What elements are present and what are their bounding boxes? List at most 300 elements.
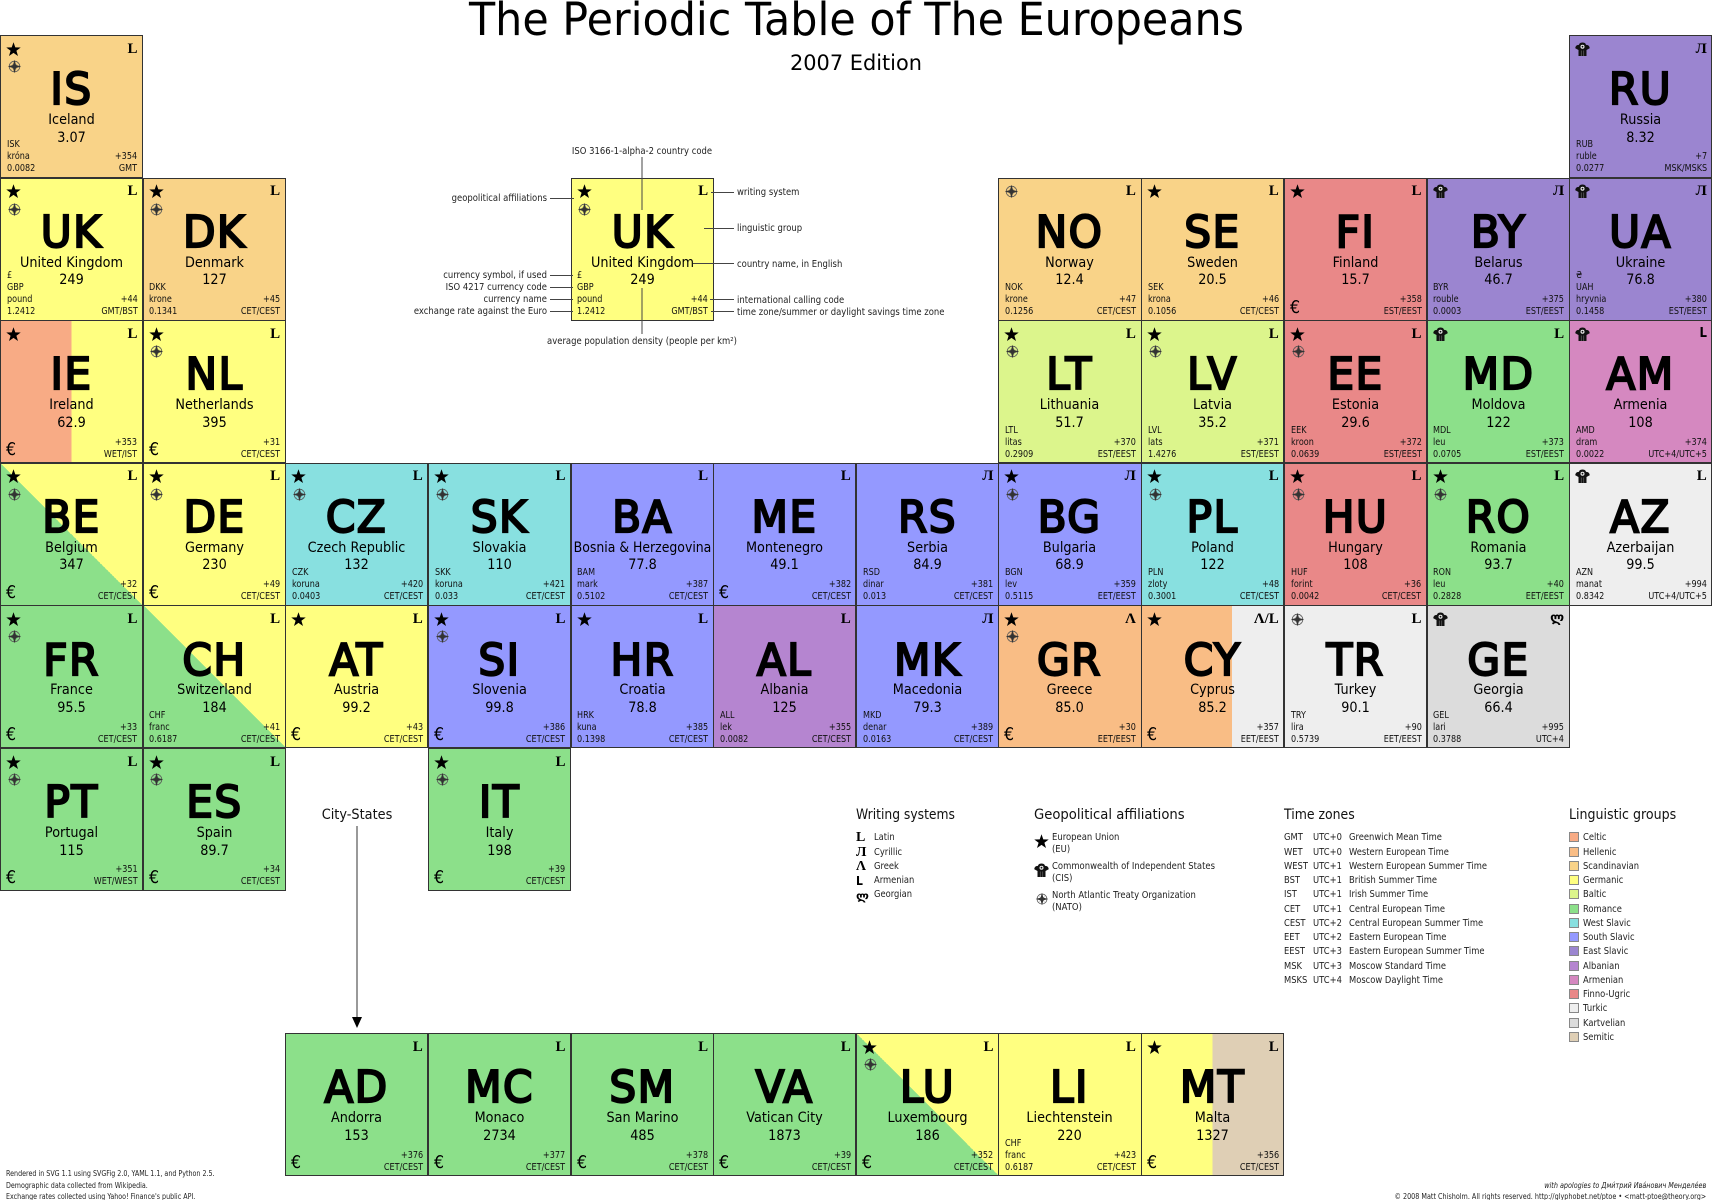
country code: LT	[1047, 349, 1093, 400]
density: 127	[202, 272, 226, 288]
calling code and time zone: +357	[1257, 722, 1279, 733]
calling code and time zone	[1240, 1150, 1279, 1174]
density: 125	[773, 700, 797, 716]
icon: NATO	[1035, 892, 1049, 906]
footer: apologies: with apologies to Дми́трий Ива́нович Менделе́ев	[1544, 1181, 1706, 1190]
zone names: Moscow Standard Time	[1349, 961, 1446, 972]
calling code and time zone: +387	[686, 579, 708, 590]
currency: krona	[1148, 294, 1171, 305]
cell: PL Poland	[1141, 463, 1284, 606]
calling code and time zone	[241, 722, 280, 746]
icon: EU	[149, 754, 164, 770]
currency: MDL	[1433, 425, 1451, 436]
currency	[292, 567, 320, 603]
density: 84.9	[913, 557, 942, 573]
cell: NL Netherlands	[143, 320, 286, 463]
UTC offsets: UTC+1	[1313, 875, 1342, 886]
currency: CHF	[149, 710, 166, 721]
currency: kroon	[1290, 437, 1313, 448]
currency: RUB	[1576, 139, 1593, 150]
calling code and time zone	[115, 151, 138, 174]
key label: geopolitical affiliations: geopolitical affiliations	[452, 193, 547, 204]
currency: AMD	[1576, 425, 1595, 436]
country code: ME	[752, 492, 818, 543]
writing system: Л	[1696, 40, 1707, 56]
calling code and time zone: CET/CEST	[384, 734, 423, 745]
zone names: Greenwich Mean Time	[1349, 832, 1442, 843]
density: 115	[59, 843, 84, 859]
key label: currency symbol: currency symbol, if used	[443, 270, 547, 281]
UTC offsets: UTC+3	[1313, 946, 1342, 957]
density: 78.8	[628, 700, 656, 716]
calling code and time zone	[241, 864, 280, 888]
calling code and time zone	[812, 722, 851, 746]
country code: LV	[1187, 349, 1238, 400]
swatch: Albanian	[1569, 961, 1579, 971]
calling code and time zone: EET/EEST	[1526, 591, 1564, 602]
density: 76.8	[1627, 272, 1655, 288]
calling code and time zone: +44	[120, 294, 137, 305]
calling code and time zone	[1241, 437, 1279, 461]
currency: 0.1056	[1148, 306, 1176, 317]
currency: ₴	[1576, 270, 1582, 281]
calling code and time zone: +352	[971, 1150, 993, 1161]
calling code and time zone	[954, 722, 993, 746]
currency: pound	[6, 294, 32, 305]
currency	[434, 567, 462, 603]
zone names: Moscow Daylight Time	[1349, 975, 1443, 986]
currency: ISK	[6, 139, 19, 150]
cell: ES Spain	[143, 748, 286, 891]
cell: AT Austria	[285, 605, 428, 748]
cell: IS Iceland	[0, 35, 143, 178]
label: CIS: (CIS)	[1052, 873, 1072, 884]
glyph column: Λ	[856, 859, 866, 874]
group names: Romance	[1583, 904, 1622, 915]
group names: Baltic	[1583, 889, 1606, 900]
zone codes: CET	[1284, 904, 1300, 915]
icon: EU	[6, 327, 21, 341]
calling code and time zone	[1648, 437, 1707, 461]
density: 46.7	[1484, 272, 1512, 288]
group names: Armenian	[1583, 975, 1623, 986]
cell: GE Georgia	[1427, 605, 1570, 748]
UTC offsets: UTC+1	[1313, 904, 1342, 915]
currency: rouble	[1433, 294, 1459, 305]
density: 230	[202, 557, 226, 573]
country name: Armenia	[1614, 397, 1668, 413]
density: 249	[630, 272, 654, 288]
writing system: L	[127, 611, 137, 627]
calling code and time zone: GMT/BST	[672, 306, 708, 317]
density: 132	[345, 557, 369, 573]
calling code and time zone: CET/CEST	[954, 591, 993, 602]
country name: United Kingdom	[591, 255, 694, 271]
density: 35.2	[1199, 415, 1227, 431]
cell: HU Hungary	[1284, 463, 1427, 606]
writing system: L	[413, 1039, 423, 1055]
currency: lari	[1433, 722, 1446, 733]
calling code and time zone: CET/CEST	[384, 1162, 423, 1173]
calling code and time zone: +48	[1262, 579, 1279, 590]
country code: AD	[325, 1062, 389, 1113]
currency: 0.8342	[1576, 591, 1604, 602]
country name: Macedonia	[893, 682, 962, 698]
country name: Serbia	[907, 540, 948, 556]
calling code and time zone: +44	[691, 294, 708, 305]
zone codes: WET	[1284, 847, 1303, 858]
calling code and time zone	[94, 864, 137, 888]
swatch: Turkic	[1569, 1003, 1579, 1013]
writing system: L	[1269, 183, 1279, 199]
currency: lek	[720, 722, 732, 733]
currency: 0.0082	[720, 734, 748, 745]
icon: NATO	[150, 203, 163, 216]
calling code and time zone	[1240, 294, 1280, 317]
country name: Monaco	[475, 1110, 524, 1126]
density: 198	[487, 843, 512, 859]
icon: NATO	[149, 487, 164, 502]
cell: EE Estonia	[1284, 320, 1427, 463]
calling code and time zone: +420	[401, 579, 423, 590]
country code: DK	[183, 207, 246, 258]
icon: NATO	[8, 203, 21, 216]
euro symbol: €	[149, 582, 159, 603]
icon: EU	[1004, 612, 1019, 627]
country name: Malta	[1195, 1110, 1231, 1126]
density: 1873	[768, 1128, 801, 1144]
calling code and time zone	[1098, 722, 1136, 746]
icon: NATO	[862, 1057, 878, 1072]
country name: Turkey	[1335, 682, 1376, 698]
zone names: British Summer Time	[1349, 875, 1437, 886]
currency: 0.1458	[1576, 306, 1604, 317]
currency	[1576, 567, 1604, 603]
country name: San Marino	[606, 1110, 678, 1126]
icon: EU	[291, 469, 306, 484]
cell: GR Greece	[998, 605, 1142, 748]
calling code and time zone	[98, 722, 137, 746]
currency: RSD	[862, 567, 879, 578]
currency: MKD	[862, 710, 881, 721]
calling code and time zone: CET/CEST	[241, 734, 280, 745]
writing system: L	[983, 1039, 993, 1055]
country name: Bosnia & Herzegovina	[573, 540, 711, 556]
cell: SM San Marino	[571, 1033, 714, 1176]
icon: EU	[149, 327, 164, 341]
currency: LTL	[1005, 425, 1018, 436]
icon: CIS	[1433, 184, 1448, 198]
country code: BG	[1038, 492, 1102, 543]
calling code and time zone	[812, 1150, 851, 1174]
cell: MC Monaco	[428, 1033, 571, 1176]
cell: DK Denmark	[143, 178, 286, 321]
zone names: Central European Time	[1349, 904, 1445, 915]
cell: SI Slovenia	[428, 605, 571, 748]
currency: TRY	[1290, 710, 1305, 721]
currency	[1576, 270, 1606, 317]
calling code and time zone	[669, 579, 708, 603]
currency: forint	[1290, 579, 1312, 590]
country code: ES	[186, 777, 242, 828]
cell: MD Moldova	[1427, 320, 1570, 463]
currency: GBP	[6, 282, 23, 293]
calling code and time zone: +376	[401, 1150, 423, 1161]
icon: NATO	[6, 772, 22, 787]
country code: TR	[1326, 635, 1385, 686]
country code: MC	[465, 1062, 534, 1113]
legend: geopolitical affiliations	[1035, 807, 1225, 919]
writing system: L	[1554, 326, 1564, 342]
density: 2734	[483, 1128, 516, 1144]
calling code and time zone: CET/CEST	[669, 591, 708, 602]
key label: writing system: writing system	[737, 187, 799, 198]
writing system: L	[841, 611, 851, 627]
calling code and time zone: +41	[263, 722, 280, 733]
icon: EU	[6, 184, 21, 198]
calling code and time zone	[669, 722, 708, 746]
cell: ME Montenegro	[713, 463, 856, 606]
currency: 0.033	[434, 591, 458, 602]
writing system: L	[1126, 326, 1136, 342]
icon: NATO	[6, 629, 22, 644]
country name: Finland	[1333, 255, 1378, 271]
currency: 0.1398	[577, 734, 605, 745]
currency	[6, 270, 35, 317]
UTC offsets	[1313, 831, 1342, 988]
icon: NATO	[1148, 344, 1163, 359]
density: 1327	[1196, 1128, 1229, 1144]
cell: UK United Kingdom	[0, 178, 143, 321]
country code: RU	[1609, 64, 1672, 115]
group names: Kartvelian	[1583, 1018, 1625, 1029]
writing system: L	[698, 611, 708, 627]
country name: Norway	[1046, 255, 1094, 271]
country code: MT	[1180, 1062, 1245, 1113]
names: Georgian	[874, 889, 912, 900]
currency: koruna	[292, 579, 320, 590]
key label: density: average population density (people per km²)	[547, 336, 737, 347]
calling code and time zone: CET/CEST	[812, 1162, 851, 1173]
euro symbol: €	[434, 1152, 444, 1173]
icon: EU	[434, 469, 449, 484]
swatch: Semitic	[1569, 1032, 1579, 1042]
writing system: L	[555, 468, 565, 484]
country code: BE	[42, 492, 101, 543]
writing system: L	[698, 1039, 708, 1055]
country code: CH	[182, 635, 246, 686]
calling code and time zone: CET/CEST	[98, 734, 137, 745]
UTC offsets: UTC+2	[1313, 918, 1342, 929]
currency: 0.013	[862, 591, 886, 602]
icon: NATO	[1290, 612, 1305, 627]
calling code and time zone: +375	[1542, 294, 1564, 305]
swatch: Germanic	[1569, 875, 1579, 885]
currency: 0.2828	[1433, 591, 1461, 602]
country code: AL	[757, 635, 812, 686]
country name: Romania	[1470, 540, 1526, 556]
calling code and time zone: UTC+4/UTC+5	[1648, 449, 1707, 460]
country code: DE	[183, 492, 245, 543]
icon: EU	[1147, 1040, 1162, 1055]
calling code and time zone: CET/CEST	[1240, 591, 1279, 602]
country name: Germany	[185, 540, 244, 556]
label: NATO: North Atlantic Treaty Organization	[1052, 890, 1196, 901]
currency	[1290, 710, 1319, 746]
icon: EU	[149, 469, 164, 484]
density: 108	[1629, 415, 1653, 431]
country name: Spain	[196, 825, 232, 841]
icon: EU	[1004, 327, 1019, 342]
currency: PLN	[1148, 567, 1163, 578]
calling code and time zone: +370	[1114, 437, 1136, 448]
cell: FI Finland	[1284, 178, 1427, 321]
icon: EU	[1147, 469, 1162, 484]
footer: credits: Rendered in SVG 1.1 using SVGFig 2.0, YAML 1.1, and Python 2.5.	[6, 1169, 215, 1178]
calling code and time zone: EST/EEST	[1526, 449, 1564, 460]
calling code and time zone	[669, 1150, 708, 1174]
swatch: West Slavic	[1569, 918, 1579, 928]
country code: RS	[898, 492, 957, 543]
euro symbol: €	[434, 867, 444, 888]
footer: credits: Demographic data collected from Wikipedia.	[6, 1180, 148, 1190]
country name: Moldova	[1471, 397, 1525, 413]
calling code and time zone: EST/EEST	[1098, 449, 1136, 460]
country code: IT	[479, 777, 520, 828]
calling code and time zone	[1383, 294, 1422, 317]
currency: króna	[6, 151, 29, 162]
country code: CY	[1184, 635, 1242, 686]
currency: lats	[1148, 437, 1162, 448]
country code: UA	[1609, 207, 1672, 258]
currency: 0.3001	[1148, 591, 1176, 602]
density: 93.7	[1484, 557, 1512, 573]
arrow: City-States to microstates row	[347, 820, 367, 1032]
icon: NATO	[150, 345, 163, 358]
country name: Italy	[486, 825, 513, 841]
density: 153	[345, 1128, 369, 1144]
country name: Russia	[1620, 112, 1661, 128]
writing system: L	[841, 1039, 851, 1055]
icon: NATO	[292, 487, 307, 502]
footer: credits	[6, 1168, 215, 1200]
calling code and time zone: +372	[1399, 437, 1421, 448]
writing system: L	[1126, 1039, 1136, 1055]
writing system: Լ	[1700, 326, 1707, 341]
writing system: L	[413, 611, 423, 627]
cell: LT Lithuania	[998, 320, 1142, 463]
writing system: L	[1411, 326, 1421, 342]
calling code and time zone: +49	[263, 579, 280, 590]
country name: Portugal	[45, 825, 98, 841]
writing system: L	[1697, 468, 1707, 484]
country code: PT	[44, 777, 99, 828]
cell: BY Belarus	[1427, 178, 1570, 321]
currency: 0.0639	[1290, 449, 1319, 460]
writing system: L	[1269, 1039, 1279, 1055]
icon: EU	[6, 754, 21, 770]
country name: Vatican City	[747, 1110, 823, 1126]
icon: NATO	[1005, 185, 1018, 198]
currency: 1.2412	[577, 306, 605, 317]
icon: EU	[1147, 327, 1162, 342]
cell: DE Germany	[143, 463, 286, 606]
calling code and time zone	[526, 1150, 565, 1174]
calling code and time zone: WET/WEST	[94, 876, 137, 887]
euro symbol: €	[6, 724, 16, 745]
heading: Time zones	[1284, 807, 1355, 823]
country code: LI	[1050, 1062, 1089, 1113]
currency: hryvnia	[1576, 294, 1606, 305]
currency: pound	[577, 294, 603, 305]
density: 220	[1058, 1128, 1082, 1144]
currency	[1005, 282, 1033, 317]
cell: MK Macedonia	[856, 605, 999, 748]
currency: litas	[1005, 437, 1022, 448]
zone codes: MSK	[1284, 961, 1302, 972]
currency	[862, 710, 891, 746]
country code: AM	[1607, 349, 1675, 400]
UTC offsets: UTC+1	[1313, 861, 1342, 872]
writing system: Л	[982, 611, 993, 627]
icon: NATO	[1433, 487, 1448, 502]
zone names: Western European Summer Time	[1349, 861, 1487, 872]
country name: United Kingdom	[20, 255, 123, 271]
calling code and time zone: EST/EEST	[1383, 449, 1421, 460]
country code: AZ	[1610, 492, 1671, 543]
calling code and time zone: +994	[1685, 579, 1707, 590]
calling code and time zone	[384, 1150, 423, 1174]
writing system: L	[270, 611, 280, 627]
writing system: L	[841, 468, 851, 484]
cell: SE Sweden	[1141, 178, 1284, 321]
country code: IS	[50, 64, 93, 115]
calling code and time zone: +377	[543, 1150, 565, 1161]
calling code and time zone: +39	[548, 864, 565, 875]
writing system: L	[555, 754, 565, 770]
currency: 1.2412	[6, 306, 35, 317]
calling code and time zone: CET/CEST	[1240, 306, 1279, 317]
calling code and time zone: +371	[1257, 437, 1279, 448]
calling code and time zone: +421	[543, 579, 565, 590]
UTC offsets: UTC+3	[1313, 961, 1342, 972]
icon: EU	[577, 184, 592, 198]
currency	[577, 270, 605, 317]
calling code and time zone: +359	[1114, 579, 1136, 590]
calling code and time zone	[241, 437, 280, 461]
label: CIS: Commonwealth of Independent States	[1052, 861, 1215, 872]
cell: AZ Azerbaijan	[1569, 463, 1712, 606]
country code: GE	[1467, 635, 1529, 686]
calling code and time zone: CET/CEST	[812, 591, 851, 602]
calling code and time zone: CET/CEST	[1097, 1162, 1136, 1173]
country name: Estonia	[1332, 397, 1379, 413]
writing system: L	[1269, 326, 1279, 342]
calling code and time zone: EET/EEST	[1098, 591, 1136, 602]
calling code and time zone: EST/EEST	[1241, 449, 1279, 460]
names: Cyrillic	[874, 847, 902, 858]
euro symbol: €	[291, 724, 301, 745]
label: EU	[1052, 832, 1119, 856]
zone names: Irish Summer Time	[1349, 889, 1428, 900]
key label: time zone: time zone/summer or daylight savings time zone	[737, 307, 944, 318]
calling code and time zone: CET/CEST	[526, 876, 565, 887]
density: 15.7	[1341, 272, 1370, 288]
currency: koruna	[434, 579, 462, 590]
UTC offsets: UTC+2	[1313, 932, 1342, 943]
currency: SEK	[1148, 282, 1163, 293]
currency	[1005, 567, 1033, 603]
